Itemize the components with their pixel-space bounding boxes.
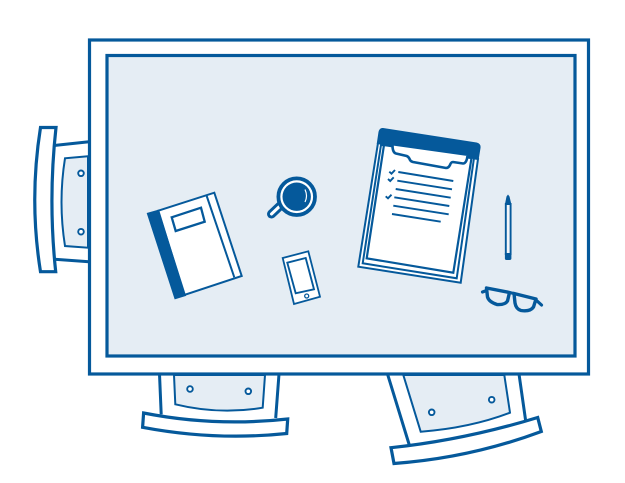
checklist lines (392, 172, 453, 222)
icon: pen (505, 194, 511, 260)
clipboard clip (392, 146, 468, 168)
icon: glasses (482, 288, 542, 311)
icon: smartphone (283, 251, 320, 304)
left chair (35, 128, 89, 272)
bottom left chair (143, 374, 288, 436)
icon: notebook (147, 193, 242, 299)
clipboard sheets (358, 143, 478, 283)
bottom right chair (388, 374, 541, 464)
table (90, 40, 588, 374)
check marks (386, 170, 395, 198)
icon: clipboard (358, 128, 480, 283)
icon: coffee mug (272, 178, 315, 215)
clipboard top bar (377, 128, 480, 158)
